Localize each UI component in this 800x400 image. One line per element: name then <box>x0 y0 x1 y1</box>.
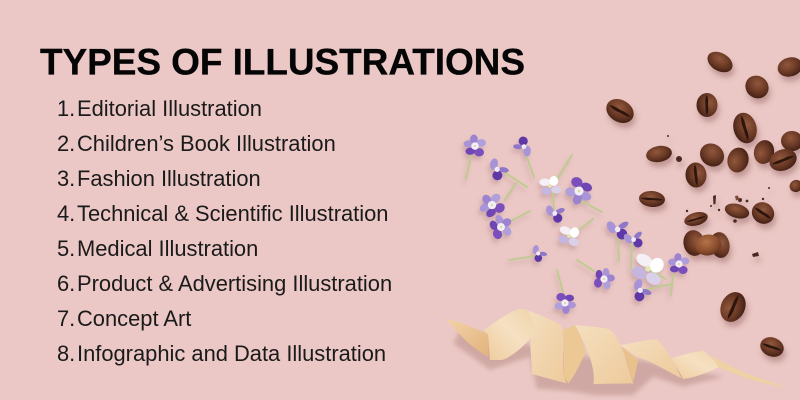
numbered list <box>57 96 392 366</box>
list item 5: 5. <box>57 236 75 261</box>
list item 1: 1. <box>57 96 75 121</box>
list item 6: 6. <box>57 271 75 296</box>
title: TYPES OF ILLUSTRATIONS <box>40 42 525 82</box>
list item 8: Infographic and Data Illustration <box>77 341 386 366</box>
list item 4: 4. <box>57 201 75 226</box>
list item 4: Technical & Scientific Illustration <box>77 201 388 226</box>
list item 6: Product & Advertising Illustration <box>77 271 392 296</box>
list item 7: 7. <box>57 306 75 331</box>
illustration: scattered purple flowers <box>463 135 689 314</box>
list item 3: Fashion Illustration <box>77 166 261 191</box>
shaving shadow <box>453 330 723 395</box>
list item 2: 2. <box>57 131 75 156</box>
list item 1: Editorial Illustration <box>77 96 262 121</box>
list item 3: 3. <box>57 166 75 191</box>
list item 5: Medical Illustration <box>77 236 258 261</box>
illustration: coffee beans <box>602 47 800 360</box>
list item 2: Children’s Book Illustration <box>77 131 336 156</box>
list item 8: 8. <box>57 341 75 366</box>
list item 7: Concept Art <box>77 306 191 331</box>
illustration: wood shaving ribbon <box>445 309 787 395</box>
shaving ribbon segments <box>445 309 787 387</box>
